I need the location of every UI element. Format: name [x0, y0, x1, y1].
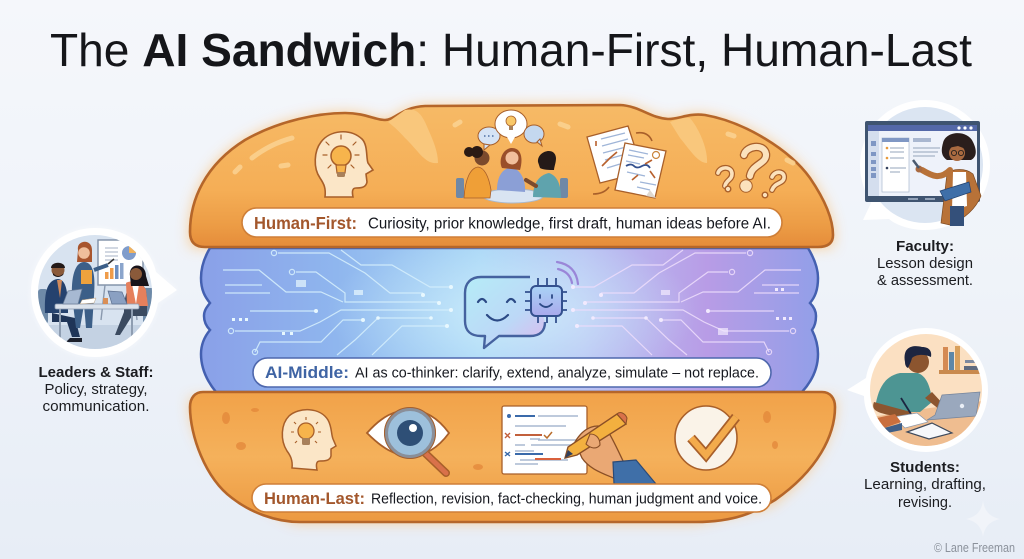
pill: AI-Middle [253, 358, 771, 387]
panel: Faculty [860, 100, 990, 289]
illustration: backdrop circle [880, 107, 983, 223]
pill: Human-Last: Reflection, revision, fact-checking, human judgment and voice. [371, 492, 762, 508]
pill: AI-Middle: AI-Middle: [265, 363, 349, 382]
panel: Students [847, 328, 990, 511]
panel: Leaders & Staff [30, 228, 177, 415]
sparkle [966, 501, 1000, 537]
illustration: team meeting [38, 235, 152, 349]
pill: AI-Middle: AI as co-thinker: clarify, extend, analyze, simulate – not replace. [355, 366, 759, 382]
text: Leaders & Staff: Policy, strategy, [44, 381, 148, 398]
screen and teacher [865, 121, 981, 226]
text: Leaders & Staff: communication. [42, 398, 150, 415]
white badge [31, 228, 177, 357]
text: Leaders & Staff: Leaders & Staff: [38, 364, 154, 381]
icon: annotated drafts [587, 126, 666, 198]
text: Students: Learning, drafting, [864, 476, 986, 493]
text: Faculty: Faculty: [896, 238, 954, 255]
icon: three people discussing [456, 110, 568, 203]
text: Students: Students: [890, 459, 960, 476]
white badge [860, 100, 990, 230]
pill: Human-First: Curiosity, prior knowledge, first draft, human ideas before AI. [368, 216, 771, 232]
bun glow [190, 105, 835, 522]
icon: head with lightbulb [282, 410, 336, 470]
text: Students [864, 459, 986, 511]
icon: check mark badge [675, 406, 737, 470]
circuit traces left [223, 250, 451, 355]
panel: Human-First top bun [190, 105, 833, 247]
text: Students: revising. [898, 494, 952, 511]
speech bubbles [478, 110, 544, 150]
text: Leaders & Staff [38, 364, 154, 415]
icon: head with lightbulb [315, 132, 373, 197]
panel: AI-Middle filling [201, 230, 818, 394]
pill: Human-First [242, 208, 782, 237]
white badge [847, 328, 988, 452]
icon: question marks [718, 147, 784, 198]
illustration: student studying [870, 334, 982, 446]
pill: Human-Last [252, 484, 771, 512]
icon: chat bubble with chip [465, 262, 578, 348]
text: Faculty [877, 238, 973, 289]
bun creases [235, 110, 793, 172]
circuit dots left [232, 280, 453, 335]
text: Faculty: & assessment. [877, 272, 973, 289]
circuit dots right [571, 285, 792, 335]
title: The AI Sandwich: Human-First, Human-Last [50, 24, 972, 76]
pill: Human-Last: Human-Last: [264, 489, 365, 508]
icon: hand with pencil [565, 413, 656, 484]
bun speckles [222, 408, 778, 470]
icon: checked document [502, 406, 587, 474]
circuit traces right [573, 250, 801, 355]
speech circle shadow [31, 228, 177, 357]
icon: chip [525, 278, 567, 323]
icon: eye with magnifying glass [367, 408, 449, 473]
panel: Human-Last bottom bun [190, 392, 835, 522]
pill: Human-First: Human-First: [254, 213, 357, 233]
text: Faculty: Lesson design [877, 255, 973, 272]
